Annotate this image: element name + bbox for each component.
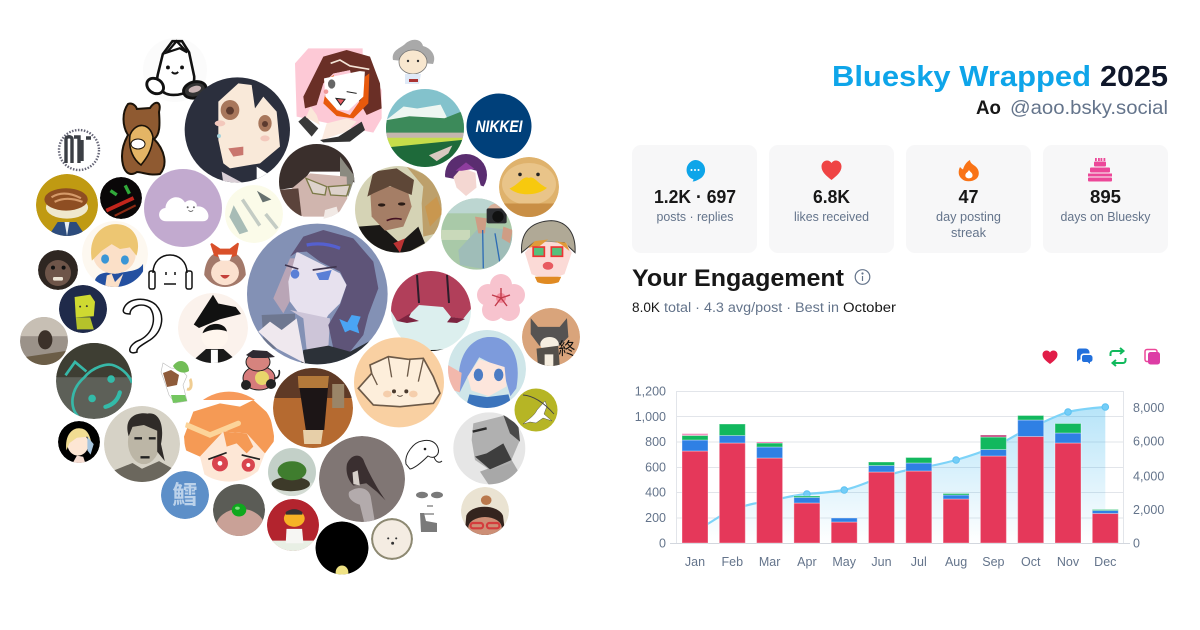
- engagement summary: 8.0K: [632, 300, 660, 315]
- chart: monthly engagement: [635, 384, 1164, 569]
- avatar: yellow box robot: [59, 285, 107, 333]
- right axis labels: 8,000: [1133, 401, 1164, 415]
- engagement summary: October: [843, 300, 897, 315]
- bars: Dec: [1092, 510, 1118, 543]
- stat card: likes: likes received: [794, 210, 869, 224]
- bars: Jan: [682, 434, 708, 543]
- engagement summary: [632, 300, 897, 315]
- avatar: headphones line drawing: [149, 252, 192, 294]
- left axis labels: 600: [645, 460, 666, 474]
- stat card: posts and replies: posts · replies: [656, 210, 734, 224]
- month labels: Oct: [1021, 555, 1041, 569]
- cumulative area: [695, 407, 1105, 543]
- avatar: MLC leather logo: [56, 127, 102, 173]
- left axis labels: [635, 384, 666, 550]
- avatar: shiba with kanji: 終: [559, 339, 576, 358]
- icon: replies bubbles: [1077, 348, 1092, 364]
- title: 2025: [1100, 61, 1168, 93]
- icon: birthday cake: [1088, 158, 1112, 182]
- stat card: streak: 47: [958, 187, 978, 207]
- avatar: gyoza dumpling: [354, 337, 444, 427]
- avatar: bald man monochrome: [452, 412, 527, 487]
- gridlines and axes: [670, 391, 1130, 544]
- avatar: bear holding dog: [122, 103, 165, 175]
- avatar: orange hair girl: [183, 390, 275, 483]
- avatar: green gem on skin: [213, 484, 265, 536]
- month labels: Sep: [982, 555, 1005, 569]
- bars: Jul: [906, 458, 932, 543]
- bars: May: [831, 518, 857, 543]
- bars: Apr: [794, 496, 820, 543]
- avatar cluster: [20, 38, 581, 579]
- bars: Jun: [868, 462, 894, 543]
- avatar: green hat cat: [161, 361, 191, 403]
- avatar: middle-aged man portrait: [353, 165, 443, 257]
- avatar: tiger on red: [267, 499, 319, 551]
- avatar: Nikkei logo: NIKKEI: [476, 117, 524, 136]
- avatar: glasses person: [277, 143, 357, 220]
- left axis labels: 400: [645, 486, 666, 500]
- avatar: shiba with kanji: [522, 308, 580, 366]
- avatar: Nikkei logo: [466, 94, 532, 158]
- month labels: Nov: [1057, 555, 1080, 569]
- left axis labels: 200: [645, 511, 666, 525]
- avatar: granny sketch: [393, 40, 434, 84]
- avatar: pink cow: [241, 350, 279, 390]
- stat card: posts and replies: 1.2K · 697: [654, 187, 736, 207]
- stat card: streak: streak: [951, 226, 987, 240]
- avatar: onigiri mascot: [143, 38, 208, 102]
- avatar: line drawn squiggle: [123, 299, 162, 353]
- chart legend: [1042, 348, 1160, 366]
- avatar: chimpanzee: [38, 250, 78, 290]
- line markers: [804, 404, 1109, 497]
- stat card: likes: 6.8K: [813, 187, 850, 207]
- avatar: blue hair anime girl: [448, 330, 526, 408]
- stat card: days on Bluesky: days on Bluesky: [1060, 210, 1151, 224]
- bars: Sep: [980, 435, 1006, 543]
- avatar: sunglasses and finger: [416, 492, 443, 532]
- avatar: blue kanji: 鱈: [172, 482, 198, 510]
- right axis labels: 6,000: [1133, 434, 1164, 448]
- month labels: Dec: [1094, 555, 1116, 569]
- avatar: man with red glasses: [461, 487, 509, 539]
- stat card: days on Bluesky: [1043, 145, 1168, 253]
- avatar: green circle with rabbit scroll: [514, 388, 558, 432]
- month labels: Apr: [797, 555, 817, 569]
- avatar: white poodle: [371, 518, 413, 560]
- stacked bars: [682, 416, 1118, 543]
- icon: quotes copy: [1145, 350, 1160, 364]
- avatar: yellow painting with food head: [36, 174, 98, 236]
- user handle: @aoo.bsky.social: [1010, 97, 1168, 119]
- month labels: Jul: [911, 555, 927, 569]
- avatar: blond boy with peace sign: [82, 221, 148, 287]
- engagement summary: total · 4.3 avg/post · Best in: [664, 300, 839, 315]
- icon: likes heart: [1042, 350, 1058, 364]
- right axis labels: 2,000: [1133, 503, 1164, 517]
- right axis labels: 4,000: [1133, 470, 1164, 484]
- right axis labels: [1133, 401, 1164, 550]
- bars: Oct: [1018, 416, 1044, 543]
- month labels: [685, 555, 1116, 569]
- avatar: green eyed glasses boy: [521, 220, 576, 284]
- bars: Aug: [943, 494, 969, 543]
- stat card: likes: [769, 145, 894, 253]
- title: Bluesky Wrapped: [832, 61, 1091, 93]
- month labels: Jan: [685, 555, 705, 569]
- month labels: May: [832, 555, 857, 569]
- left axis labels: 800: [645, 435, 666, 449]
- month labels: Jun: [871, 555, 892, 569]
- bars: Feb: [719, 424, 745, 543]
- right axis labels: 0: [1133, 536, 1140, 550]
- avatar: bonsai: [268, 448, 316, 496]
- bars: Mar: [757, 442, 783, 543]
- month labels: Feb: [722, 555, 743, 569]
- heading: Your Engagement: Your Engagement: [632, 265, 844, 292]
- icon: chat bubble: [687, 160, 705, 182]
- left axis labels: 1,000: [635, 410, 666, 424]
- icon: heart: [822, 160, 842, 180]
- avatar: blue kanji: [161, 471, 209, 519]
- avatar: cherry blossom: [477, 274, 525, 321]
- avatar: teal robot face: [56, 343, 132, 419]
- avatar: ink wash art: [225, 185, 283, 243]
- user handle: Ao: [976, 97, 1001, 119]
- stat card: days on Bluesky: 895: [1090, 187, 1121, 207]
- month labels: Aug: [945, 555, 967, 569]
- avatar: fox eared girl: [204, 242, 246, 287]
- avatar: dog line sketch: [406, 440, 442, 469]
- month labels: Mar: [759, 555, 780, 569]
- stat card: posts and replies: [632, 145, 757, 253]
- stat card: streak: day posting: [936, 210, 1001, 224]
- avatar: small blond girl on black: [58, 421, 100, 463]
- avatar: red hair teal skin face: [391, 271, 471, 355]
- avatar: purple hair character: [445, 154, 487, 196]
- bars: Nov: [1055, 424, 1081, 543]
- avatar: shiba with black hat boy: [178, 293, 248, 363]
- icon: info: [855, 270, 870, 284]
- avatar: swallow on grey: [319, 436, 405, 522]
- left axis labels: 0: [659, 536, 666, 550]
- cumulative line: [695, 407, 1105, 530]
- avatar: purple cloud: [144, 169, 222, 247]
- avatar: black-haired anime girl: [184, 77, 290, 183]
- avatar: dark keyboard lights: [100, 177, 142, 219]
- left axis labels: 1,200: [635, 384, 666, 398]
- stat card: streak: [906, 145, 1031, 253]
- avatar: pink-background red hair girl: [295, 48, 382, 142]
- avatar: pen sketch man: [104, 406, 180, 482]
- avatar: yellow duck plush: [499, 157, 559, 217]
- avatar: green landscape: [386, 89, 464, 167]
- avatar: dark beer: [273, 368, 353, 448]
- icon: repost arrows: [1110, 348, 1126, 366]
- avatar: photographer: [440, 197, 514, 272]
- icon: flame: [959, 160, 979, 181]
- avatar: black circle with figure: [316, 522, 368, 579]
- avatar: raccoon dog: [20, 317, 68, 365]
- avatar: large purple hair girl with cup: [247, 223, 388, 368]
